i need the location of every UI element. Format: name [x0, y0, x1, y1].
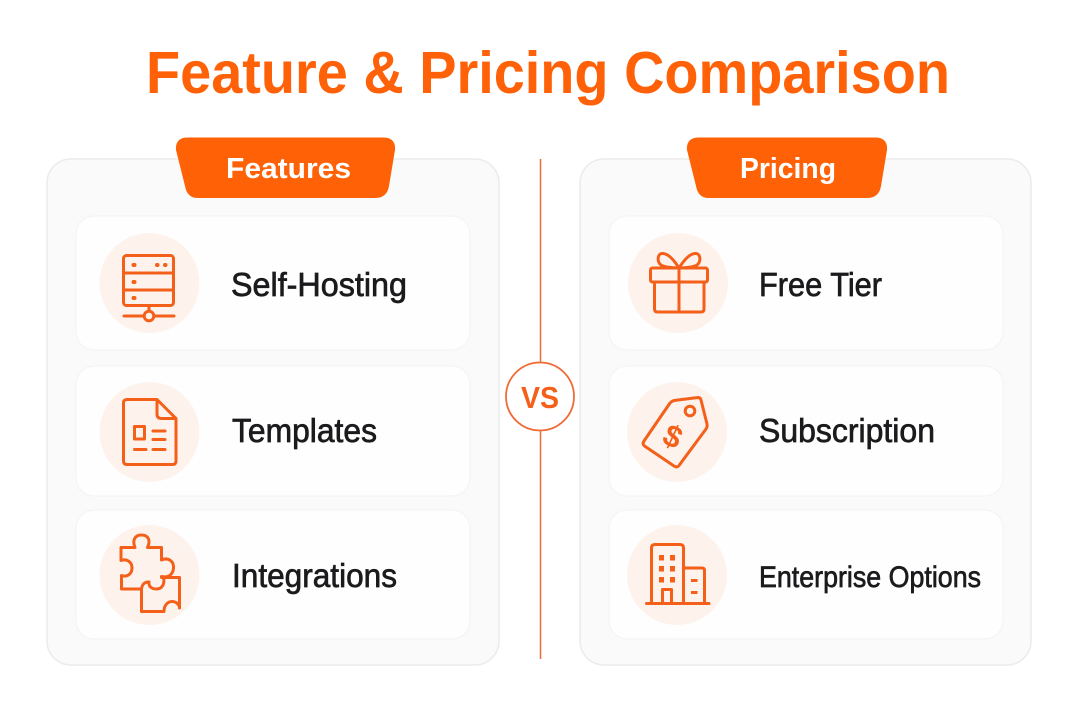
card: free tier — [609, 216, 1003, 350]
card: integrations — [76, 510, 470, 639]
icon: price tag — [627, 382, 727, 482]
heading tab: features — [176, 138, 395, 198]
label: self-hosting: Self-Hosting — [231, 266, 407, 303]
vs badge — [506, 362, 574, 430]
card: self-hosting — [76, 216, 470, 350]
panel: pricing — [580, 138, 1031, 665]
panel: features — [47, 138, 499, 665]
icon: server — [100, 233, 200, 333]
divider line — [540, 159, 542, 659]
vs badge: VS — [521, 380, 559, 415]
icon: document — [100, 382, 200, 482]
heading tab: features: Features — [226, 153, 351, 185]
label: subscription: Subscription — [759, 412, 935, 449]
heading tab: pricing — [687, 138, 887, 198]
card: subscription — [609, 366, 1003, 496]
icon: puzzle pieces — [100, 525, 200, 625]
card: enterprise options — [609, 510, 1003, 639]
icon: gift — [628, 233, 728, 333]
card: templates — [76, 366, 470, 496]
title: Feature & Pricing Comparison — [146, 40, 950, 106]
label: enterprise options: Enterprise Options — [759, 561, 981, 594]
label: templates: Templates — [232, 412, 377, 449]
icon: price tag: $ — [658, 417, 688, 456]
label: integrations: Integrations — [232, 557, 397, 594]
label: free tier: Free Tier — [759, 266, 882, 303]
icon: office buildings — [627, 525, 727, 625]
heading tab: pricing: Pricing — [740, 153, 836, 185]
